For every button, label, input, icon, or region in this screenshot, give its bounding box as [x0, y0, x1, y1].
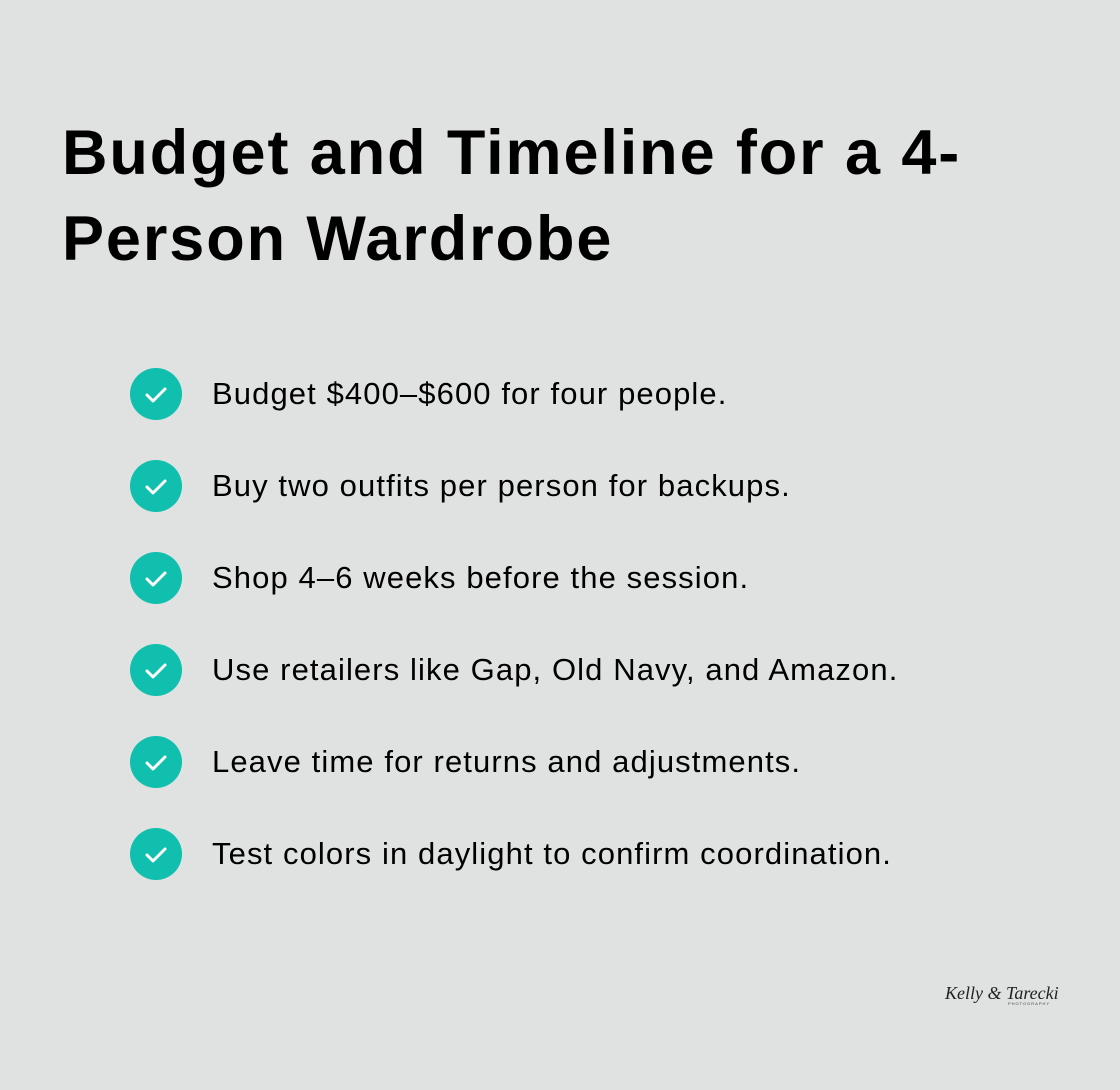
item 6: Test colors in daylight to confirm coordination.	[212, 836, 892, 871]
title	[62, 118, 961, 274]
item 3	[130, 552, 749, 604]
icon: check	[130, 828, 182, 880]
icon: check	[130, 552, 182, 604]
icon: check	[130, 736, 182, 788]
icon: check	[130, 368, 182, 420]
title: Person Wardrobe	[62, 204, 613, 274]
item 4: Use retailers like Gap, Old Navy, and Amazon.	[212, 652, 898, 687]
item 1	[130, 368, 727, 420]
logo: Kelly & Tarecki	[944, 983, 1059, 1003]
item 2	[130, 460, 791, 512]
item 5	[130, 736, 801, 788]
title: Budget and Timeline for a 4-	[62, 118, 961, 188]
item 2: Buy two outfits per person for backups.	[212, 468, 791, 503]
item 1: Budget $400–$600 for four people.	[212, 376, 727, 411]
logo: PHOTOGRAPHY	[1008, 1001, 1050, 1006]
icon: check	[130, 460, 182, 512]
item 4	[130, 644, 898, 696]
item 3: Shop 4–6 weeks before the session.	[212, 560, 749, 595]
item 6	[130, 828, 892, 880]
item 5: Leave time for returns and adjustments.	[212, 744, 801, 779]
icon: check	[130, 644, 182, 696]
